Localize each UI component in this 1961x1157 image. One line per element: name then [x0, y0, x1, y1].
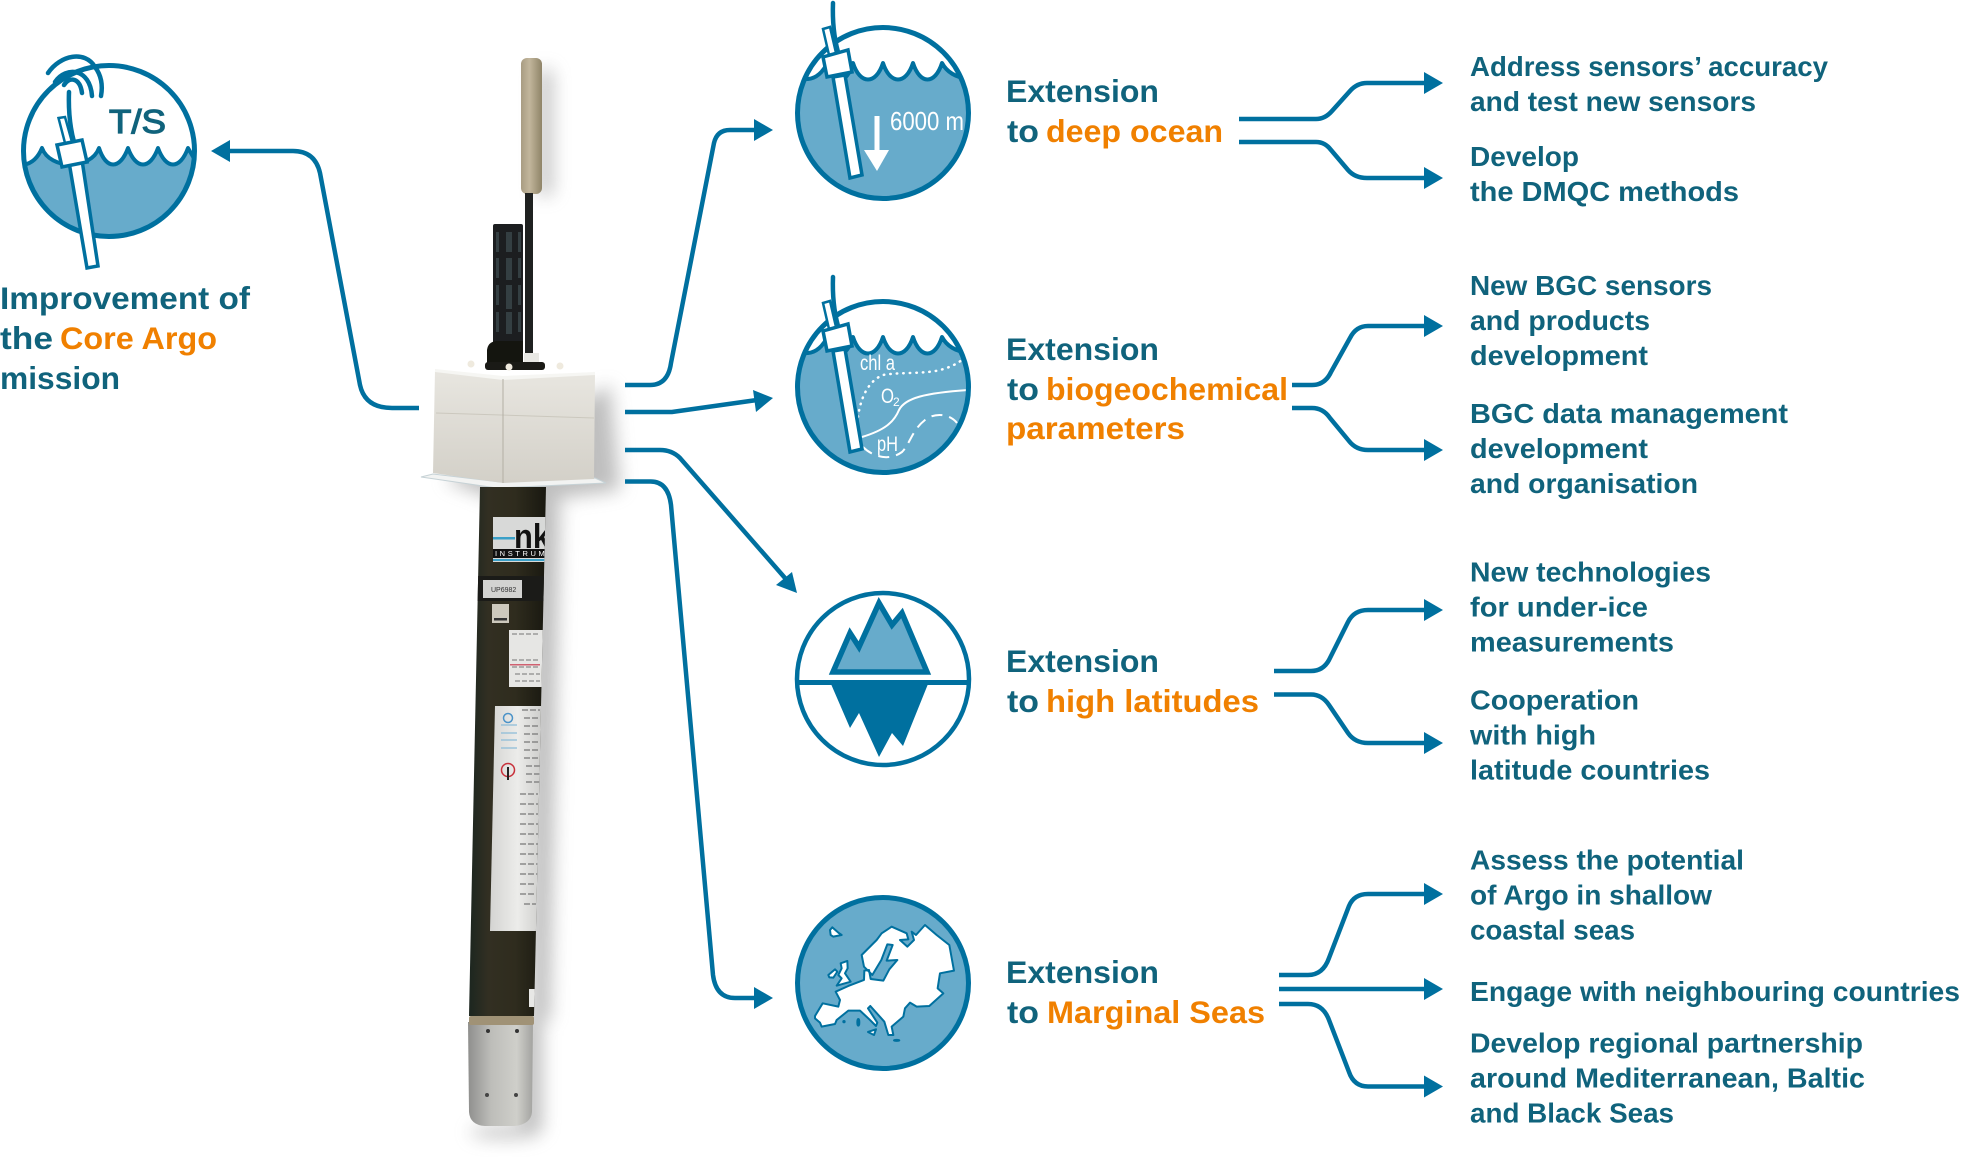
- text: high latitudes items: for under-ice: [1470, 592, 1648, 622]
- parameter labels: chl a: [860, 352, 895, 375]
- heading: Extension to deep ocean: to: [1007, 113, 1039, 149]
- nke label: INSTRUMENTS: [495, 549, 578, 558]
- icon: deep ocean circle: [795, 3, 972, 205]
- dark tube body: [469, 487, 546, 1016]
- heading: Extension to deep ocean: Extension: [1006, 73, 1159, 109]
- fork arrows: marginal seas: [1279, 883, 1443, 1098]
- heading: Improvement of the Core Argo mission: Improvement of: [0, 280, 251, 316]
- heading: Improvement of the Core Argo mission: the: [0, 320, 53, 356]
- text: marginal seas items: and Black Seas: [1470, 1098, 1674, 1128]
- heading: Extension to biogeochemical parameters: [1006, 331, 1288, 446]
- text: biogeochemical items: [1470, 270, 1788, 499]
- text: marginal seas items: around Mediterranean, Baltic: [1470, 1062, 1865, 1094]
- arrow: float to biogeochemical: [625, 390, 773, 412]
- heading: Extension to biogeochemical parameters: biogeochemical: [1046, 371, 1288, 407]
- drop shadow of float: [445, 70, 620, 1138]
- text: deep ocean items: the DMQC methods: [1470, 176, 1739, 207]
- heading: Extension to Marginal Seas: Marginal Seas: [1047, 994, 1265, 1030]
- text: biogeochemical items: development: [1470, 340, 1648, 371]
- chl a dotted curve: [858, 359, 963, 417]
- text: high latitudes items: [1469, 556, 1711, 786]
- heading: Extension to biogeochemical parameters: parameters: [1006, 410, 1185, 446]
- antenna: [521, 58, 542, 194]
- text: marginal seas items: Assess the potential: [1470, 844, 1744, 876]
- icon: iceberg circle: [797, 593, 969, 765]
- fork arrows: deep ocean: [1239, 72, 1443, 189]
- text: biogeochemical items: New BGC sensors: [1470, 270, 1712, 301]
- text: marginal seas items: Engage with neighbouring countries: [1470, 976, 1960, 1007]
- heading: Improvement of the Core Argo mission: [0, 280, 251, 396]
- heading: Extension to high latitudes: high latitudes: [1046, 683, 1259, 719]
- warning icon: [502, 764, 514, 780]
- pH dashed curve: [863, 415, 957, 457]
- text: high latitudes items: measurements: [1470, 626, 1674, 658]
- icon: Europe map circle: [798, 898, 968, 1068]
- text: marginal seas items: coastal seas: [1470, 914, 1635, 946]
- parameter labels: pH: [877, 433, 898, 456]
- T/S label: T/S: [109, 103, 166, 140]
- text: marginal seas items: Develop regional partnership: [1470, 1028, 1863, 1058]
- fork arrows: biogeochemical: [1292, 315, 1443, 461]
- photo: Argo float instrument: UP6982: [491, 587, 516, 594]
- icon: core Argo T/S float circle: [20, 57, 195, 268]
- photo: Argo float instrument: [421, 58, 620, 1138]
- text: biogeochemical items: development: [1470, 433, 1648, 464]
- heading: Extension to high latitudes: to: [1007, 683, 1039, 719]
- text: biogeochemical items: and organisation: [1470, 468, 1698, 499]
- text: marginal seas items: of Argo in shallow: [1470, 880, 1713, 910]
- white float top box: [421, 369, 606, 488]
- text: high latitudes items: New technologies: [1470, 556, 1711, 588]
- text: biogeochemical items: BGC data management: [1470, 398, 1788, 429]
- sensor housing: [468, 224, 564, 370]
- heading: Extension to Marginal Seas: Extension: [1006, 954, 1159, 990]
- text: high latitudes items: latitude countries: [1470, 754, 1710, 786]
- arrow: float to deep ocean: [625, 119, 773, 385]
- text: biogeochemical items: and products: [1470, 305, 1650, 336]
- nke label: [493, 517, 546, 562]
- heading: Improvement of the Core Argo mission: mission: [0, 360, 120, 396]
- metal end cap: [468, 1016, 534, 1126]
- heading: Extension to high latitudes: [1006, 643, 1259, 719]
- fork arrows: high latitudes: [1274, 599, 1443, 754]
- heading: Extension to Marginal Seas: to: [1007, 994, 1039, 1030]
- heading: Extension to high latitudes: Extension: [1006, 643, 1159, 679]
- heading: Extension to biogeochemical parameters: to: [1007, 371, 1039, 407]
- text: marginal seas items: [1470, 844, 1960, 1128]
- parameter labels: O: [881, 385, 894, 408]
- 6000 m label: 6000 m: [890, 106, 964, 136]
- text: high latitudes items: Cooperation: [1470, 684, 1639, 716]
- nke label: nk: [514, 518, 550, 556]
- parameter labels: 2: [893, 395, 900, 409]
- depth arrow: [864, 116, 889, 171]
- arrow: float to core Argo: [211, 140, 419, 408]
- icon: biogeochemical circle: [795, 277, 972, 479]
- heading: Extension to deep ocean: [1006, 73, 1223, 149]
- text: deep ocean items: Develop: [1470, 141, 1579, 172]
- parameter labels: [860, 352, 900, 456]
- text: deep ocean items: and test new sensors: [1470, 86, 1756, 117]
- arrow: float to high latitudes: [625, 450, 797, 593]
- text: high latitudes items: with high: [1469, 720, 1596, 750]
- heading: Extension to Marginal Seas: [1006, 954, 1265, 1030]
- text: deep ocean items: Address sensors’ accuracy: [1470, 51, 1829, 82]
- heading: Extension to biogeochemical parameters: Extension: [1006, 331, 1159, 367]
- heading: Improvement of the Core Argo mission: Core Argo: [60, 320, 217, 356]
- O2 solid curve: [862, 390, 968, 437]
- text: deep ocean items: [1470, 51, 1829, 207]
- arrow: float to marginal seas: [625, 481, 773, 1009]
- heading: Extension to deep ocean: deep ocean: [1046, 113, 1223, 149]
